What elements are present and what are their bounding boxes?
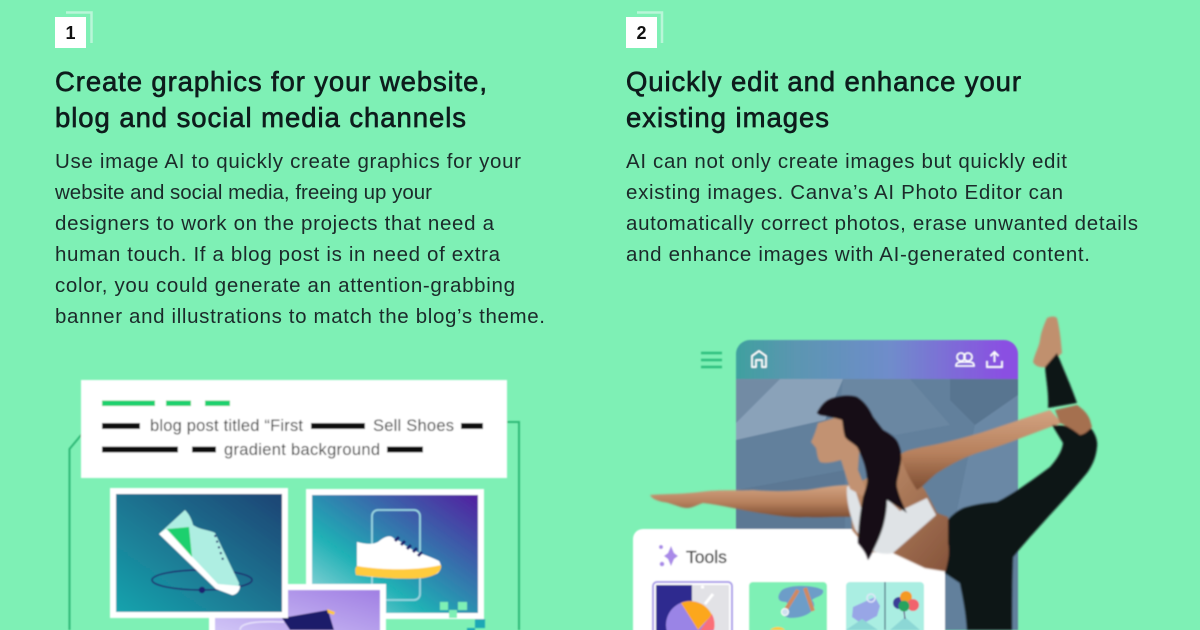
step 2 heading: existing images bbox=[626, 102, 829, 133]
step 2 body text: and enhance images with AI-generated content. bbox=[626, 243, 1090, 266]
step 1 number badge: 1 bbox=[65, 23, 76, 43]
yoga woman cutout bbox=[650, 316, 1097, 630]
leggings shin bbox=[1045, 353, 1077, 408]
illustration: photo editor app bbox=[633, 316, 1097, 630]
step 1 body text bbox=[54, 150, 545, 328]
tool thumbnail: pie bbox=[653, 582, 732, 630]
photo background bbox=[736, 379, 1018, 630]
step 1 heading: Create graphics for your website, bbox=[55, 66, 487, 97]
raised foot bbox=[1033, 316, 1062, 367]
step 1 body text: designers to work on the projects that need a bbox=[55, 212, 495, 235]
app header bar bbox=[736, 340, 1018, 379]
decorative pixels bbox=[467, 619, 485, 630]
step 1 body text: banner and illustrations to match the blog’s theme. bbox=[55, 305, 545, 328]
hair bbox=[817, 396, 907, 560]
icon: share bbox=[987, 352, 1002, 367]
tools panel bbox=[633, 529, 945, 630]
generated image: graduation cap bbox=[209, 584, 386, 630]
step 2 number badge: 2 bbox=[636, 23, 647, 43]
step 2 body text: AI can not only create images but quickly edit bbox=[626, 150, 1067, 173]
step 1 body text: Use image AI to quickly create graphics for your bbox=[55, 150, 521, 173]
step 1 heading bbox=[55, 66, 487, 133]
window frame outline bbox=[70, 422, 519, 630]
step 2 heading: Quickly edit and enhance your bbox=[626, 66, 1021, 97]
step 2 body text: automatically correct photos, erase unwanted details bbox=[626, 212, 1138, 235]
prompt box: gradient background bbox=[224, 441, 380, 459]
menu icon bbox=[701, 353, 722, 367]
prompt box bbox=[81, 380, 507, 478]
sports bra bbox=[847, 483, 936, 554]
leggings bbox=[945, 425, 1097, 630]
tool thumbnail: balloons bbox=[846, 582, 924, 630]
raised arm bbox=[900, 410, 1062, 490]
step 2 body text bbox=[626, 150, 1138, 266]
generated image: white sneaker bbox=[306, 489, 484, 619]
step 2 heading bbox=[626, 66, 1021, 133]
step 1 body text: website and social media, freeing up your bbox=[54, 181, 432, 204]
prompt box: Sell Shoes bbox=[373, 417, 454, 435]
prompt box: blog post titled “First bbox=[150, 417, 303, 435]
icon: sparkle bbox=[659, 545, 678, 566]
icon: home bbox=[752, 351, 766, 367]
step 2 body text: existing images. Canva’s AI Photo Editor can bbox=[626, 181, 1063, 204]
generated image: tilted sneaker bbox=[110, 488, 288, 618]
step 1 number badge bbox=[55, 12, 92, 48]
step 1 body text: human touch. If a blog post is in need of extra bbox=[55, 243, 501, 266]
back arm bbox=[650, 485, 855, 517]
step 1 body text: color, you could generate an attention-grabbing bbox=[55, 274, 515, 297]
tools label: Tools bbox=[686, 547, 727, 567]
hand on foot bbox=[1055, 405, 1092, 435]
icon: people bbox=[956, 353, 974, 366]
tool thumbnail: erase bbox=[749, 582, 827, 630]
step 1 heading: blog and social media channels bbox=[55, 102, 466, 133]
head and neck bbox=[811, 415, 870, 500]
step 2 number badge bbox=[626, 12, 662, 48]
illustration: AI image generator bbox=[70, 380, 519, 630]
torso and shoulder bbox=[850, 455, 950, 572]
